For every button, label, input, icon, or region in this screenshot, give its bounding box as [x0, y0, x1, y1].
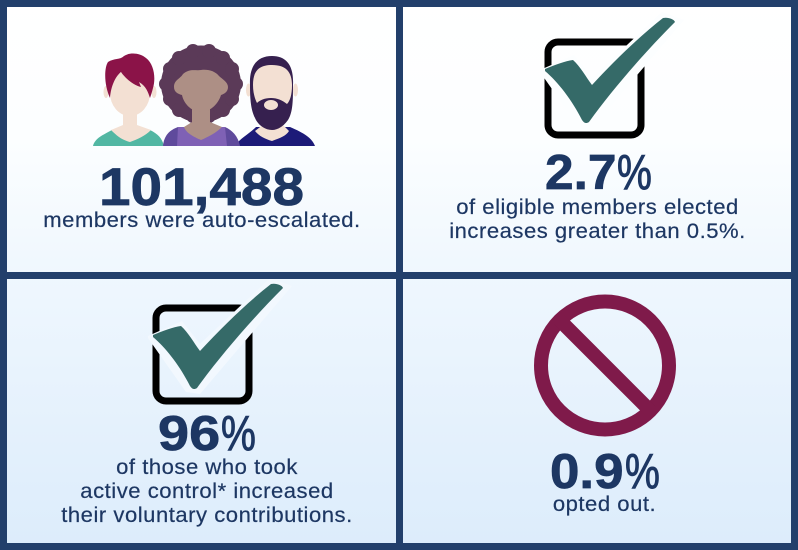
panel: elected increases	[449, 18, 746, 243]
stat: 2.7%: %	[617, 146, 652, 200]
text: members were auto-escalated: members were auto-escalated.	[43, 209, 361, 232]
text: eligible members elected: increases greater than 0.5%.	[449, 220, 746, 243]
text: active control: their voluntary contributions.	[61, 504, 353, 527]
man with beard	[235, 56, 315, 146]
icon: checkbox with check mark	[544, 18, 675, 138]
text: active control: active control* increased	[80, 480, 334, 503]
stat: 0.9%: %	[625, 445, 660, 499]
woman with curly hair	[159, 44, 243, 146]
text: active control	[61, 456, 353, 527]
text: active control: of those who took	[116, 456, 298, 479]
stat: 0.9%	[550, 445, 660, 499]
woman with red hair	[93, 54, 164, 146]
stat: 96%: %	[221, 407, 256, 461]
icon: prohibition sign	[534, 294, 676, 436]
icon: three people avatars	[93, 44, 315, 146]
panel: opted out	[534, 294, 676, 516]
stat: 96%	[158, 407, 256, 461]
stat: 2.7%: 2.7	[545, 146, 617, 200]
panel: members auto-escalated	[43, 44, 361, 232]
stat: 2.7%	[545, 146, 652, 200]
stat: 101,488: 101,488	[99, 158, 304, 217]
stat: 96%: 96	[158, 407, 220, 461]
text: eligible members elected	[449, 196, 746, 243]
text: opted out: opted out.	[553, 493, 656, 516]
stat: 0.9%: 0.9	[550, 445, 624, 499]
icon: checkbox with check mark	[152, 284, 283, 404]
text: eligible members elected: of eligible members elected	[456, 196, 739, 219]
panel: active control	[61, 284, 353, 527]
